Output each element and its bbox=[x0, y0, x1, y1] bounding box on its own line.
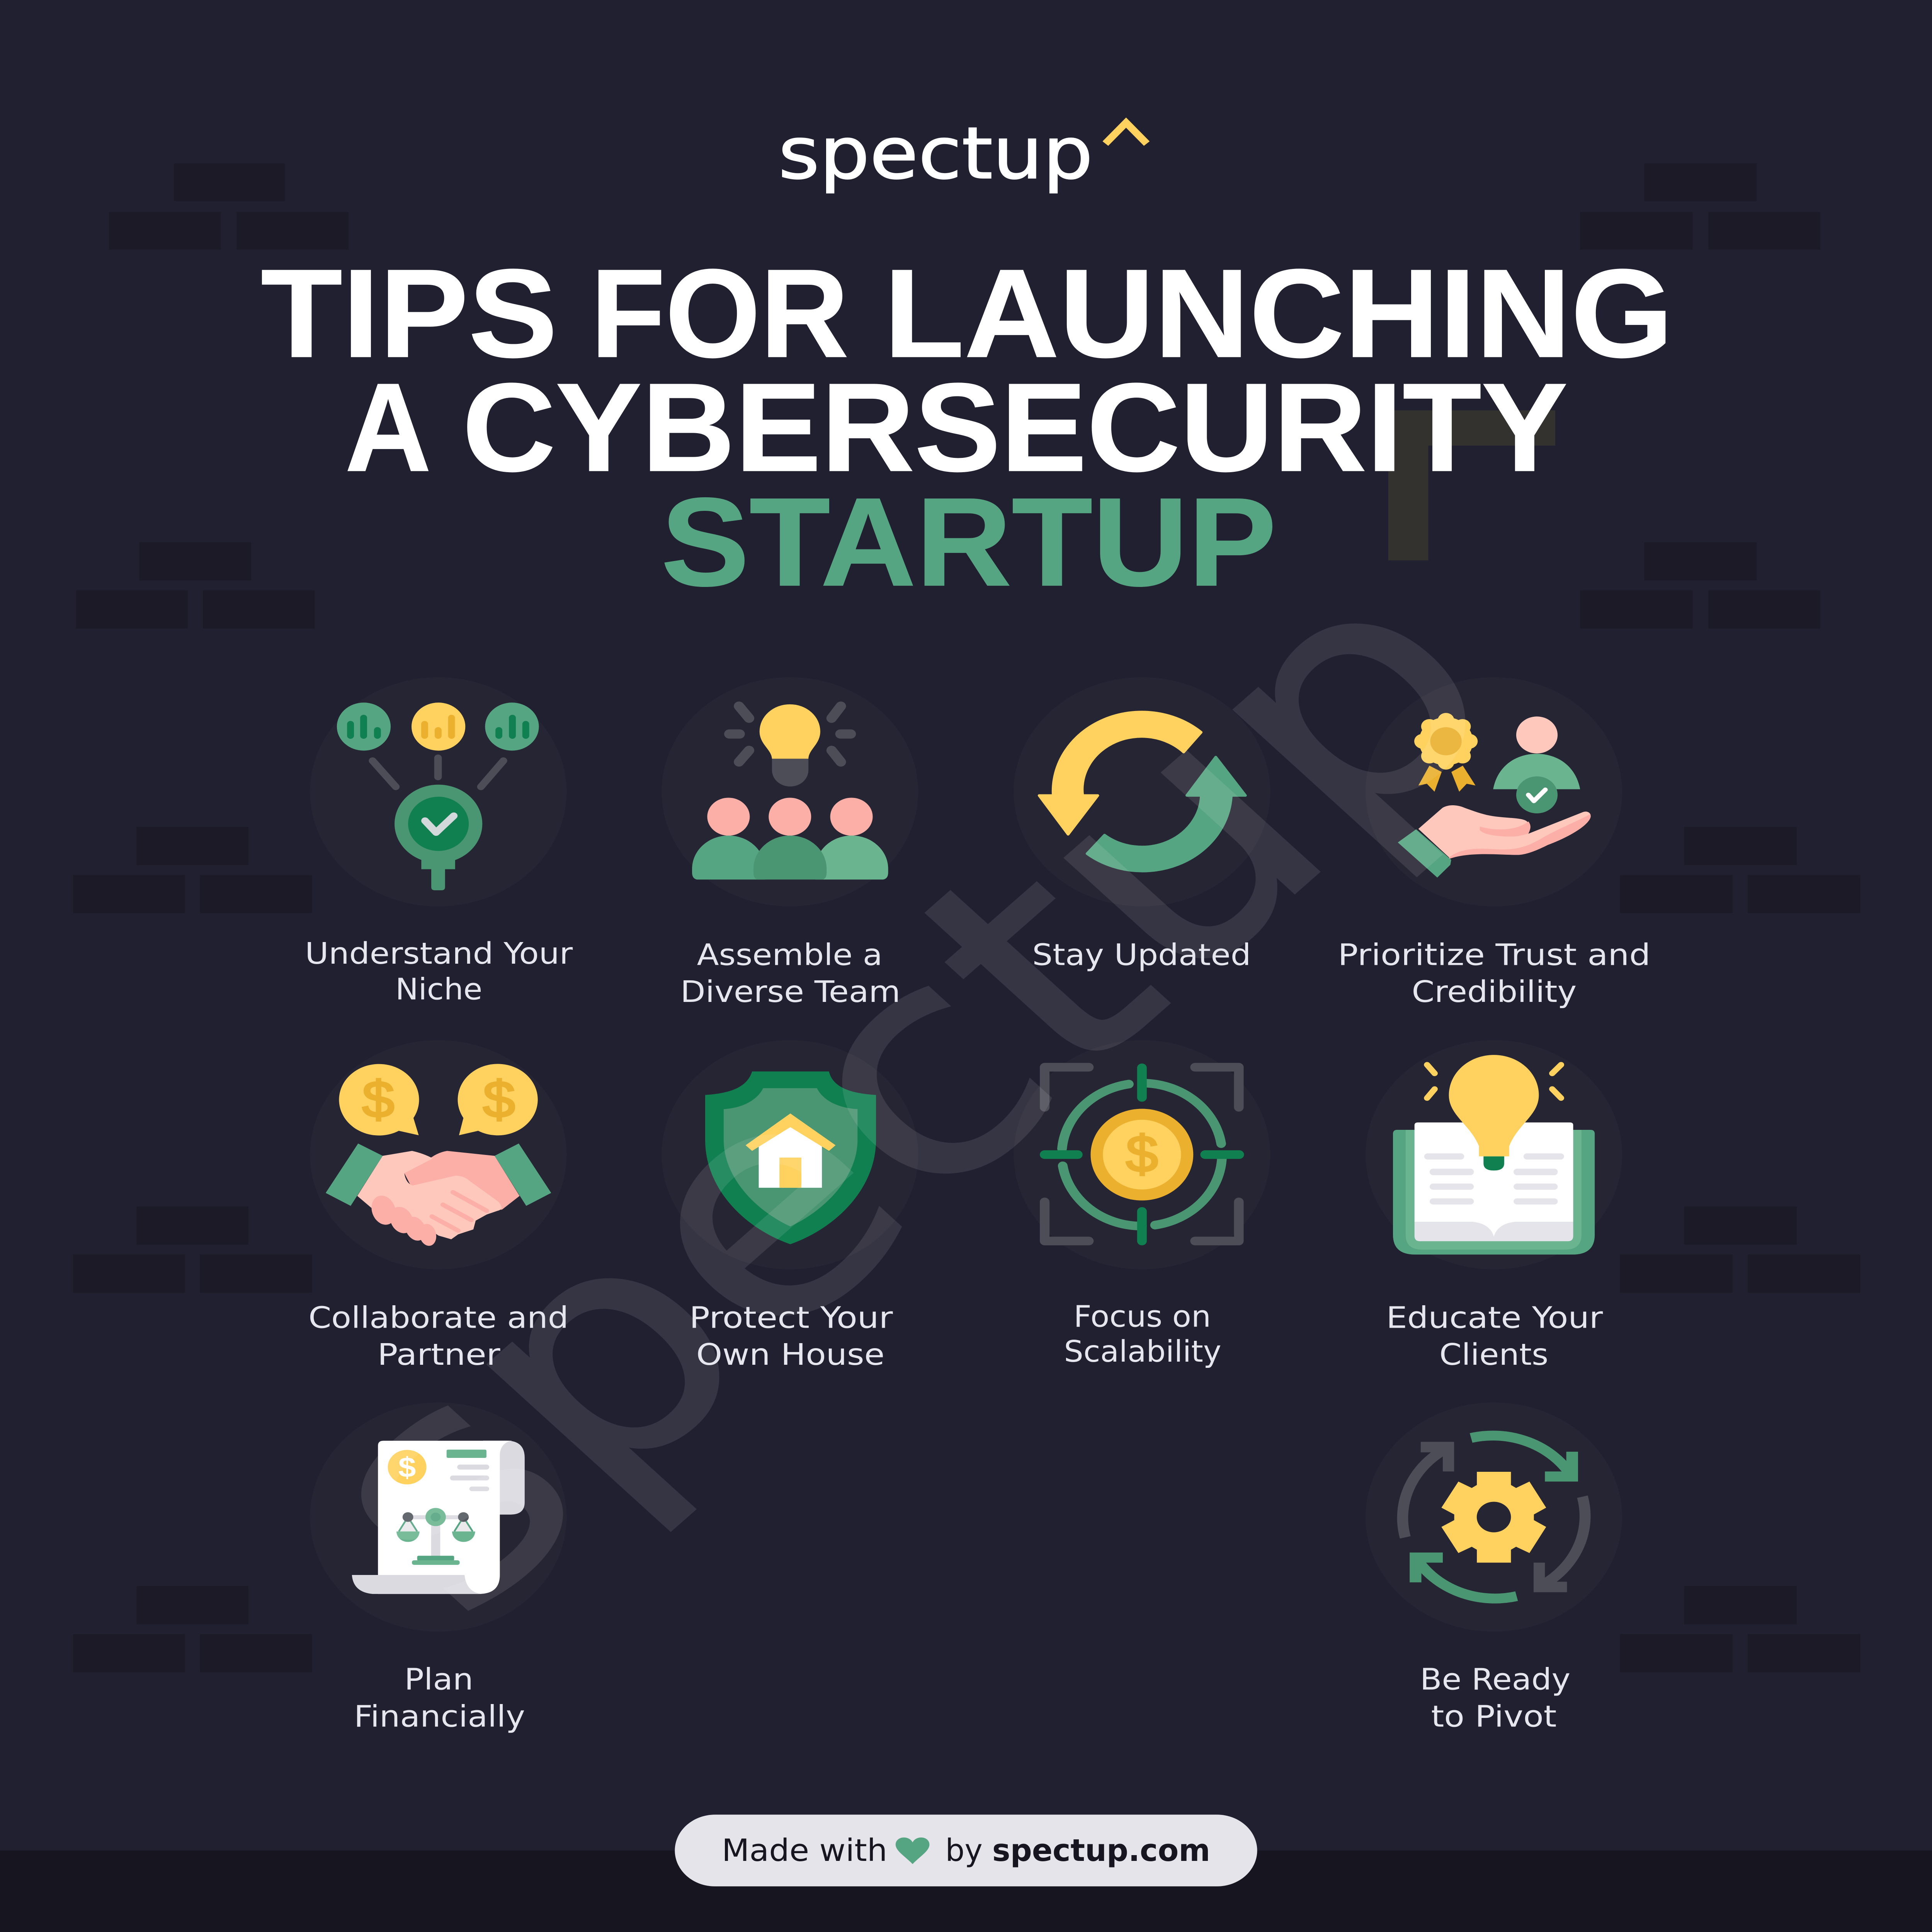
icon: understand your niche bbox=[310, 677, 566, 906]
label: educate your clients: Educate Your bbox=[1386, 1301, 1603, 1335]
watermark: spectup: spectup bbox=[235, 500, 1567, 1678]
label: prioritize trust and credibility bbox=[1338, 938, 1650, 1009]
icon: collaborate handshake bbox=[310, 1040, 566, 1269]
icon: prioritize trust and credibility bbox=[1366, 677, 1622, 906]
footer pill: by bbox=[945, 1832, 983, 1868]
label: protect your own house: Own House bbox=[696, 1338, 884, 1372]
label: understand your niche bbox=[305, 937, 573, 1007]
title: CYBERSECURITY bbox=[462, 357, 1568, 498]
label: collaborate and partner: Partner bbox=[378, 1338, 500, 1372]
title bbox=[261, 243, 1673, 612]
label: collaborate and partner: Collaborate and bbox=[308, 1301, 568, 1335]
footer pill: Made with bbox=[722, 1832, 887, 1868]
label: assemble a diverse team: Diverse Team bbox=[680, 975, 900, 1009]
icon: assemble a diverse team bbox=[662, 677, 918, 906]
label: stay updated: Stay Updated bbox=[1032, 938, 1251, 972]
title: STARTUP bbox=[661, 472, 1277, 612]
title: TIPS bbox=[261, 243, 558, 384]
footer pill bbox=[675, 1815, 1257, 1886]
icon: educate your clients book bbox=[1366, 1040, 1622, 1269]
label: educate your clients: Clients bbox=[1439, 1338, 1548, 1372]
label: assemble a diverse team bbox=[680, 938, 900, 1009]
title: FOR bbox=[591, 243, 849, 384]
title: A bbox=[345, 357, 431, 498]
label: prioritize trust and credibility: Credibility bbox=[1412, 975, 1577, 1009]
label: be ready to pivot: to Pivot bbox=[1431, 1700, 1557, 1734]
icon: plan financially document: $ bbox=[398, 1451, 416, 1483]
label: educate your clients bbox=[1386, 1301, 1603, 1372]
label: understand your niche: Niche bbox=[395, 973, 482, 1007]
label: focus on scalability: Focus on bbox=[1074, 1300, 1211, 1334]
label: focus on scalability: Scalability bbox=[1064, 1335, 1221, 1369]
label: plan financially bbox=[354, 1663, 525, 1734]
icon: stay updated arrows bbox=[1014, 677, 1270, 906]
footer pill: spectup.com bbox=[992, 1832, 1210, 1868]
icon: protect your own house shield bbox=[662, 1040, 918, 1269]
icon: collaborate handshake: $ bbox=[483, 1071, 515, 1128]
title: LAUNCHING bbox=[884, 243, 1673, 384]
label: plan financially: Plan bbox=[404, 1663, 473, 1697]
label: be ready to pivot: Be Ready bbox=[1420, 1663, 1570, 1697]
label: collaborate and partner bbox=[308, 1301, 568, 1372]
label: focus on scalability bbox=[1064, 1300, 1221, 1369]
label: prioritize trust and credibility: Prioritize Trust and bbox=[1338, 938, 1650, 972]
icon: heart bbox=[896, 1837, 929, 1864]
label: assemble a diverse team: Assemble a bbox=[697, 938, 883, 972]
icon: focus on scalability target: $ bbox=[1126, 1125, 1158, 1183]
icon: collaborate handshake: $ bbox=[362, 1071, 395, 1128]
label: protect your own house bbox=[689, 1301, 893, 1372]
label: plan financially: Financially bbox=[354, 1700, 525, 1734]
icon: be ready to pivot gear bbox=[1366, 1402, 1622, 1632]
logo: spectup: spectup bbox=[778, 112, 1093, 195]
label: protect your own house: Protect Your bbox=[689, 1301, 893, 1335]
icon: focus on scalability target bbox=[1014, 1040, 1270, 1269]
label: understand your niche: Understand Your bbox=[305, 937, 573, 971]
icon: plan financially document bbox=[310, 1402, 566, 1632]
label: be ready to pivot bbox=[1420, 1663, 1570, 1734]
